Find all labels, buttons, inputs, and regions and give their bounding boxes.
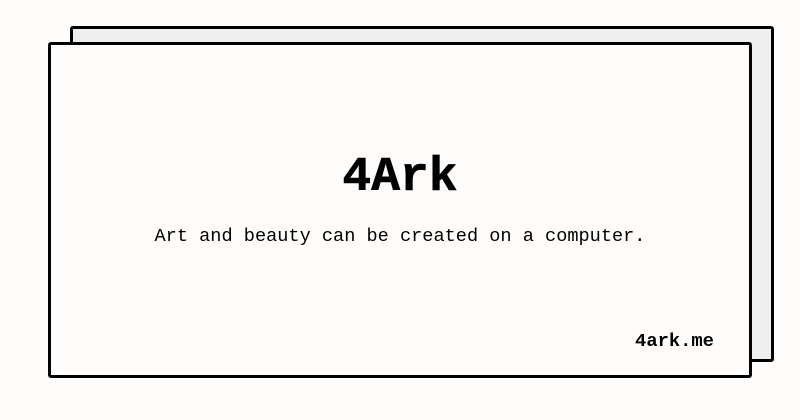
subtitle: Art and beauty can be created on a computer. <box>155 226 645 247</box>
footer link text: 4ark.me <box>635 330 714 352</box>
panel: back card <box>70 26 774 362</box>
title: 4Ark <box>342 151 458 205</box>
panel: front card <box>48 42 752 378</box>
